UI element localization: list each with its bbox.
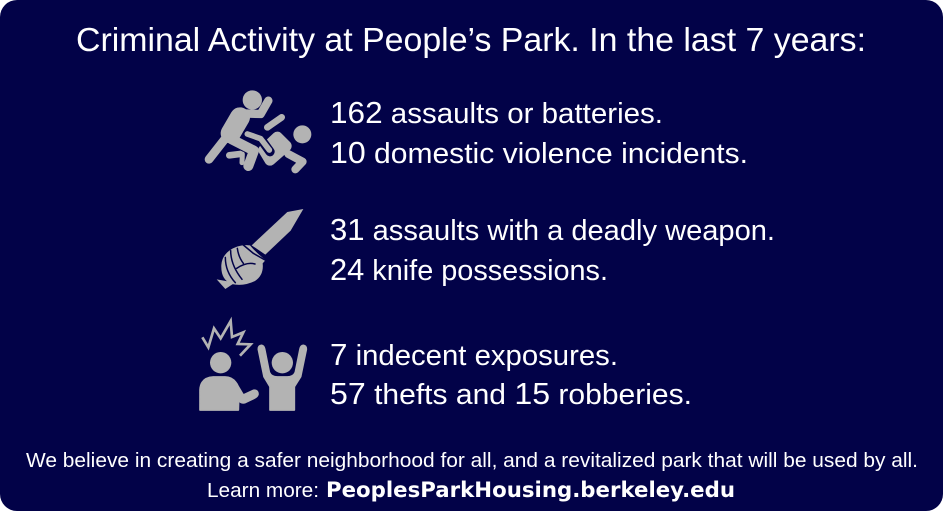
text block: exposures and thefts [330, 337, 692, 411]
fist [221, 245, 266, 285]
icon: indecent exposure and theft figures [200, 321, 306, 410]
text block: exposures and thefts: 7 indecent exposures. [330, 337, 618, 372]
footer link line: Learn more: [207, 480, 319, 502]
text block: assaults: 10 domestic violence incidents. [330, 135, 748, 170]
footer statement: We believe in creating a safer neighborhood for all, and a revitalized park that will be used by all. [26, 450, 918, 472]
text block: weapons [330, 212, 775, 287]
text block: assaults: 162 assaults or batteries. [330, 95, 663, 130]
footer link line: PeoplesParkHousing.berkeley.edu [326, 478, 735, 502]
icon: two people fighting [209, 90, 311, 169]
knife pommel [217, 279, 235, 289]
text block: weapons: 24 knife possessions. [330, 252, 608, 287]
icon: hand holding a knife [217, 209, 303, 289]
text block: weapons: 31 assaults with a deadly weapon. [330, 212, 775, 247]
title: Criminal Activity at People’s Park. In the last 7 years: [76, 21, 866, 58]
text block: exposures and thefts: 57 thefts and 15 robberies. [330, 376, 692, 411]
knife blade [252, 209, 303, 255]
text block: assaults [330, 95, 748, 170]
